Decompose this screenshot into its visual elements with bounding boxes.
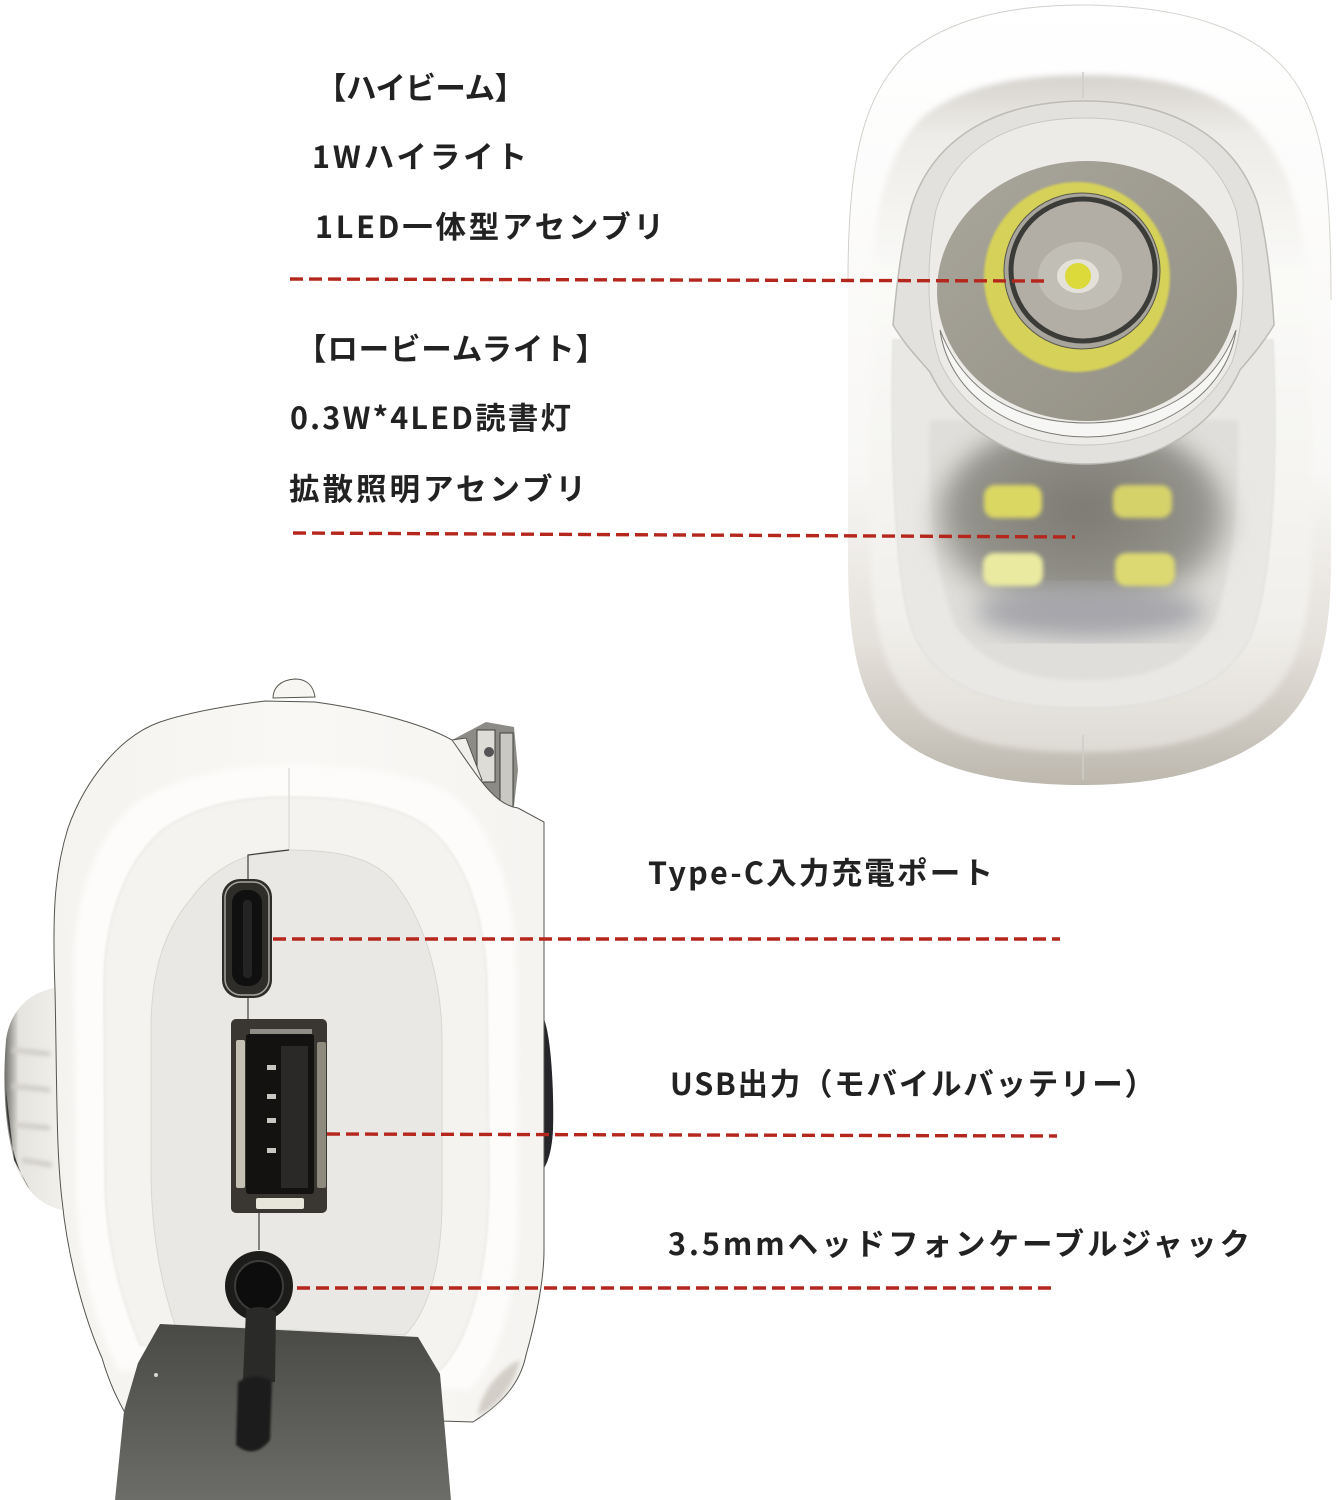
callout: low beam [289, 325, 1075, 537]
leader line: high beam [290, 279, 1048, 281]
frosted low beam panel [892, 340, 1275, 708]
leader line: low beam [293, 533, 1075, 537]
USB label: USB出力（モバイルバッテリー） [670, 1060, 1155, 1104]
high beam heading: 【ハイビーム】 [316, 64, 525, 108]
leader line: USB [327, 1134, 1057, 1136]
low beam heading: 【ロービームライト】 [296, 325, 606, 369]
low beam power: 0.3W*4LED読書灯 [290, 394, 571, 438]
leader line: jack [297, 1286, 1055, 1290]
headphone jack [225, 1251, 293, 1321]
photo: device end with USB ports [4, 679, 553, 1500]
right side black button [544, 1019, 553, 1168]
USB contacts [267, 1065, 276, 1153]
port recess [151, 850, 442, 1335]
body shell [54, 701, 544, 1422]
dark ring [1011, 199, 1155, 341]
bottom right vent [478, 1360, 520, 1415]
clear lens housing [893, 101, 1274, 464]
high beam power: 1Wハイライト [312, 133, 527, 177]
photo: flashlight end with high and low beam LEDs [848, 5, 1331, 785]
yellow LED ring [984, 182, 1170, 372]
dark strap [115, 1324, 451, 1500]
raised inner ring [104, 797, 489, 1370]
strap cable [236, 1307, 276, 1451]
device body shell [848, 5, 1331, 785]
low beam assembly: 拡散照明アセンブリ [289, 465, 586, 509]
low beam LEDs [983, 485, 1175, 586]
leader line: Type-C [273, 937, 1060, 941]
high beam LED [1065, 263, 1091, 289]
metal clasp [452, 722, 518, 808]
outer channel [74, 765, 518, 1390]
Type-C label: Type-C入力充電ポート [648, 849, 993, 893]
high beam assembly: 1LED一体型アセンブリ [315, 203, 664, 247]
jack label: 3.5mmヘッドフォンケーブルジャック [668, 1220, 1250, 1264]
side knob [4, 988, 62, 1210]
low beam frosted shadow [934, 420, 1230, 620]
raised inner ring [870, 75, 1312, 752]
USB-A port [231, 1019, 327, 1213]
Type-C port [222, 879, 272, 998]
reflector disc [937, 161, 1237, 421]
top nub [273, 679, 315, 698]
callout: high beam [290, 64, 1048, 281]
